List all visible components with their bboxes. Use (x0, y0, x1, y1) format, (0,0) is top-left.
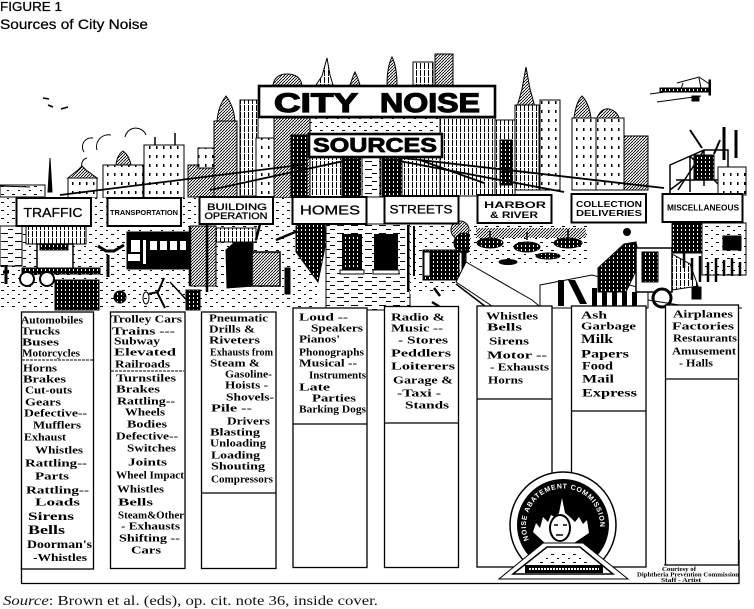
sign: collection and deliveries: DELIVERIES (576, 208, 642, 218)
transportation noise list: Turnstiles (116, 372, 177, 384)
building operation noise list: Gasoline- (225, 368, 272, 380)
traffic noise list: Trucks (21, 326, 61, 338)
miscellaneous noise list: Restaurants (673, 332, 738, 344)
credit note: Staff - Artist (661, 577, 702, 584)
transportation noise list (111, 314, 184, 556)
harbor noise list (486, 310, 550, 386)
transportation noise list: Defective-- (116, 430, 178, 442)
traffic noise list: Gears (25, 396, 62, 408)
transportation noise list: Bells (118, 496, 154, 508)
homes noise list: Parties (312, 392, 357, 404)
homes noise list: Musical -- (299, 358, 357, 370)
sign: homes (292, 197, 366, 224)
building operation noise list: Hoists - (225, 380, 268, 392)
sign: streets: STREETS (390, 202, 452, 216)
building operation noise list: Blasting (210, 426, 261, 438)
collection noise list: Food (582, 358, 613, 372)
streets noise list: Peddlers (391, 348, 452, 360)
illustration: brick tenement (326, 224, 410, 310)
illustration: collection truck (540, 228, 701, 308)
traffic noise list: Brakes (23, 374, 67, 386)
miscellaneous noise list: Airplanes (673, 308, 734, 320)
traffic noise list: Bells (28, 522, 65, 537)
transportation noise list: Wheel Impact (116, 470, 184, 482)
panel: transportation (110, 312, 185, 568)
building operation noise list (209, 312, 274, 486)
miscellaneous noise list: Amusement (672, 346, 736, 358)
collection noise list: Express (582, 386, 637, 400)
sign: building operation: OPERATION (204, 211, 268, 221)
sign: miscellaneous: MISCELLANEOUS (667, 204, 740, 212)
homes noise list: Speakers (311, 322, 364, 334)
traffic noise list: Parts (35, 470, 70, 482)
traffic noise list: Loads (35, 496, 81, 508)
homes noise list: Barking Dogs (299, 404, 367, 416)
transportation noise list: Trolley Cars (111, 314, 183, 326)
traffic noise list: Exhaust (24, 432, 66, 444)
building operation noise list: Pneumatic (209, 312, 268, 324)
transportation noise list: Railroads (115, 358, 171, 370)
figure heading (0, 0, 148, 32)
traffic noise list: Buses (22, 336, 60, 348)
harbor noise list: Whistles (486, 310, 539, 322)
transportation noise list: Trains --- (112, 326, 175, 338)
sign: traffic: TRAFFIC (24, 205, 82, 220)
homes noise list (299, 312, 367, 416)
miscellaneous noise list: Factories (672, 320, 735, 332)
traffic noise list: Cut-outs (25, 384, 73, 396)
building operation noise list: Shovels- (226, 392, 274, 404)
panel: homes (293, 308, 367, 568)
homes noise list: Phonographs (299, 346, 365, 358)
sign: transportation (108, 198, 181, 226)
illustration: harbor and river with boats (456, 224, 590, 310)
homes noise list: Instruments (309, 370, 367, 382)
traffic noise list: Sirens (28, 509, 74, 523)
transportation noise list: Rattling-- (117, 396, 175, 408)
sign: homes: HOMES (300, 202, 360, 218)
sign: building operation: BUILDING (207, 202, 267, 212)
panel: streets (384, 306, 458, 568)
collection noise list: Milk (581, 332, 613, 346)
transportation noise list: Cars (131, 544, 162, 556)
harbor noise list: Bells (487, 322, 523, 334)
streets noise list: Garage & (393, 374, 453, 386)
seal: noise abatement commission (498, 471, 630, 580)
building operation noise list: Drivers (227, 416, 271, 428)
illustration: city skyline (0, 54, 648, 198)
miscellaneous noise list (672, 308, 738, 370)
panel: miscellaneous (666, 305, 738, 565)
transportation noise list: - Exhausts (121, 520, 181, 532)
building operation noise list: Unloading (210, 438, 267, 450)
collection noise list: Ash (581, 310, 607, 322)
title sign: city noise: CITY (274, 88, 358, 118)
panel: collection and deliveries (572, 306, 646, 567)
harbor noise list: Sirens (489, 336, 530, 348)
traffic noise list (21, 314, 92, 564)
credit note (637, 565, 739, 584)
sign: transportation: TRANSPORTATION (110, 208, 178, 217)
transportation noise list: Wheels (125, 406, 166, 418)
harbor noise list: Motor -- (487, 350, 547, 362)
collection noise list (581, 310, 637, 400)
collection noise list: Garbage (581, 320, 636, 332)
traffic noise list: -Whistles (33, 552, 88, 564)
traffic noise list: Automobiles (21, 314, 84, 326)
sign: streets (384, 196, 458, 224)
streets noise list: - Stores (398, 334, 449, 346)
streets noise list: Loiterers (391, 360, 456, 372)
traffic noise list: Rattling-- (25, 458, 87, 470)
building operation noise list: Steam & (210, 358, 260, 370)
homes noise list: Late (299, 382, 330, 394)
panel: harbor and river (477, 306, 552, 567)
streets noise list: Stands (405, 400, 450, 412)
building operation noise list: Loading (211, 450, 261, 462)
illustration: building operation with crane (200, 218, 326, 310)
sign: miscellaneous (662, 194, 742, 222)
seal: noise abatement commission: NOISE ABATEMENT COMMISSION (521, 484, 605, 542)
overhead wires (0, 157, 664, 195)
source note: Source : Brown et al. (eds), op. cit. note 36, inside cover. (3, 594, 378, 609)
collection noise list: Mail (582, 372, 615, 386)
transportation noise list: Whistles (117, 484, 165, 496)
collection noise list: Papers (581, 346, 629, 360)
subtitle sign: sources: SOURCES (313, 135, 437, 157)
transportation noise list: Switches (127, 442, 177, 454)
streets noise list (391, 312, 456, 412)
credit note: Diphtheria Prevention Commission (637, 572, 739, 578)
transportation noise list: Joints (128, 456, 168, 468)
illustration: airplane (650, 77, 711, 102)
sign: collection and deliveries (572, 194, 646, 222)
transportation noise list: Shifting -- (119, 532, 180, 544)
traffic noise list: Rattling-- (26, 484, 89, 496)
traffic noise list: Whistles (35, 444, 84, 456)
building operation noise list: Compressors (211, 474, 274, 486)
harbor noise list: Horns (488, 374, 524, 386)
panel: traffic (21, 312, 94, 569)
homes noise list: Pianos' (299, 334, 340, 346)
traffic noise list: Mufflers (33, 420, 82, 432)
building operation noise list: Riveters (209, 334, 261, 346)
sign: traffic (16, 198, 91, 226)
illustration: steel construction site (670, 127, 746, 195)
building operation noise list: Drills & (209, 324, 255, 336)
outer frame (22, 540, 739, 584)
title sign: city noise: NOISE (380, 88, 480, 118)
sign: building operation (200, 197, 273, 224)
credit note: Courtesy of (662, 566, 697, 573)
sign: harbor and river (478, 195, 552, 223)
building operation noise list: Exhausts from (210, 346, 273, 358)
illustration: street vendors and tree (408, 221, 474, 307)
sign: harbor and river: HARBOR (484, 200, 546, 211)
streets noise list: Music -- (391, 322, 443, 334)
figure heading: Sources of City Noise (0, 16, 148, 32)
transportation noise list: Subway (114, 336, 161, 348)
transportation noise list: Elevated (114, 346, 176, 358)
traffic noise list: Defective-- (24, 408, 87, 420)
transportation noise list: Bodies (127, 418, 168, 430)
traffic noise list: Motorcycles (22, 348, 81, 360)
sign: harbor and river: & RIVER (490, 210, 538, 221)
traffic noise list: Doorman's (27, 537, 92, 551)
streets noise list: Radio & (391, 312, 445, 324)
building operation noise list: Shouting (211, 460, 266, 472)
streets noise list: -Taxi - (397, 388, 441, 400)
sign: collection and deliveries: COLLECTION (576, 199, 642, 209)
miscellaneous noise list: - Halls (679, 358, 714, 370)
building operation noise list: Pile -- (211, 402, 252, 414)
panel: building operation (202, 312, 276, 568)
illustration: street scene with traffic (0, 198, 320, 310)
title sign: city noise (259, 86, 495, 118)
transportation noise list: Steam&Other (118, 510, 184, 522)
harbor noise list: - Exhausts (490, 362, 550, 374)
transportation noise list: Brakes (116, 384, 161, 396)
traffic noise list: Horns (23, 362, 58, 374)
homes noise list: Loud -- (299, 312, 348, 324)
illustration: factory and crowd at right (648, 223, 746, 308)
